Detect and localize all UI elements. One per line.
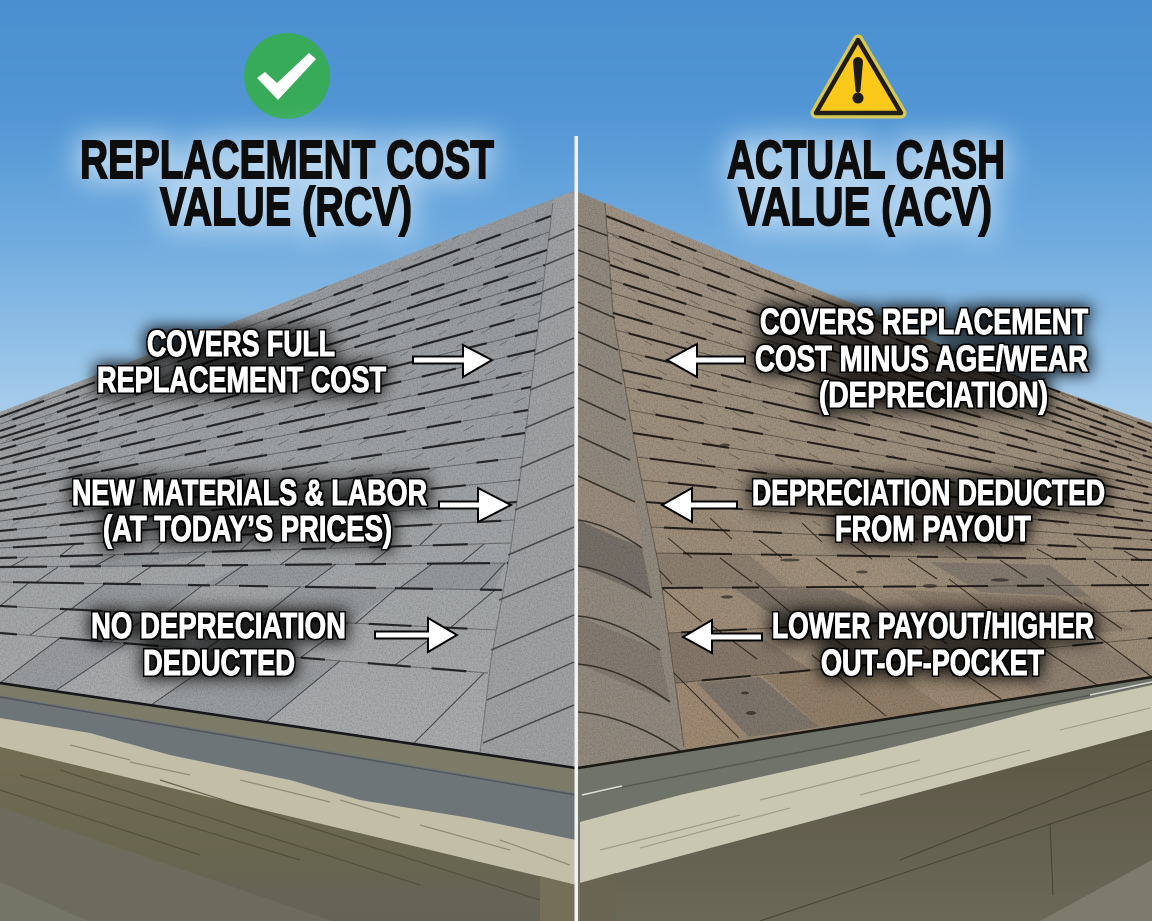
shingle course lines (606, 216, 1152, 683)
title: replacement cost value: VALUE (RCV) (160, 177, 412, 237)
label: covers full replacement cost: REPLACEMENT COST (97, 359, 386, 400)
title: actual cash value: ACTUAL CASH (727, 130, 1005, 190)
arrow: RCV point 2 (439, 488, 511, 522)
arrow: ACV point 1 (667, 344, 745, 377)
center divider (574, 136, 578, 921)
label: covers full replacement cost (97, 323, 386, 400)
label: covers full replacement cost: COVERS FULL (147, 323, 335, 364)
title: actual cash value: VALUE (ACV) (738, 177, 992, 237)
label: new materials and labor: NEW MATERIALS & LABOR (72, 472, 427, 513)
fascia and wall: right (578, 677, 1152, 921)
title: replacement cost value (80, 130, 494, 237)
title: replacement cost value: REPLACEMENT COST (80, 130, 494, 190)
label: covers replacement cost minus age/wear: (DEPRECIATION) (819, 374, 1048, 415)
label: no depreciation deducted (91, 605, 346, 683)
label: depreciation deducted from payout (752, 472, 1105, 549)
icon: warning triangle (816, 40, 901, 113)
roof grain texture (578, 190, 1152, 770)
arrow: ACV point 3 (683, 620, 762, 653)
label: no depreciation deducted: NO DEPRECIATION (91, 605, 346, 646)
label: covers replacement cost minus age/wear (755, 301, 1088, 415)
damage marks on shingles (720, 444, 1009, 715)
label: new materials and labor: (AT TODAY’S PRICES) (103, 508, 392, 549)
roof grain texture (0, 190, 576, 770)
label: new materials and labor (72, 472, 427, 549)
label: lower payout higher out-of-pocket: OUT-OF-POCKET (821, 642, 1044, 683)
title: actual cash value (727, 130, 1005, 237)
shingle tone patches (0, 552, 505, 722)
arrow: ACV point 2 (662, 488, 737, 522)
worn shingle colour patches (656, 540, 1152, 737)
hip strip: worn shingles (578, 192, 686, 768)
arrow: RCV point 1 (413, 345, 492, 377)
arrow: RCV point 3 (375, 618, 457, 652)
shingle course lines (0, 216, 551, 673)
label: lower payout higher out-of-pocket (772, 605, 1094, 683)
shingle seams: upper rows (0, 234, 543, 532)
panel: worn roof (right) (578, 192, 1152, 767)
shingle seams: upper rows (612, 234, 1152, 532)
label: depreciation deducted from payout: FROM PAYOUT (835, 508, 1031, 549)
fascia and wall: left (0, 683, 576, 921)
hip strip: new shingles (480, 190, 576, 768)
panel: new roof (left) (0, 190, 574, 766)
sky background (0, 0, 1152, 460)
label: no depreciation deducted: DEDUCTED (143, 642, 295, 683)
icon: green check (244, 33, 330, 119)
